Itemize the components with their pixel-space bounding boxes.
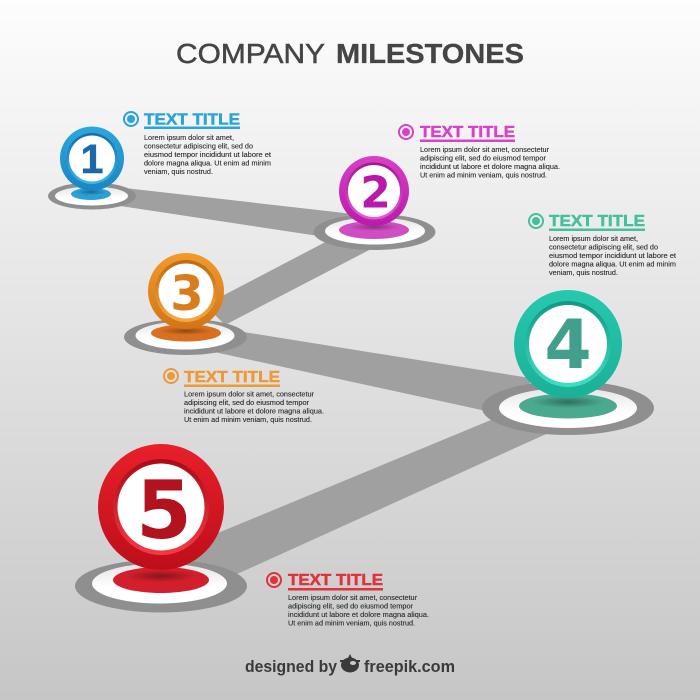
body 3: adipiscing elit, sed do eiusmod tempor: [184, 400, 310, 407]
body 5: [288, 595, 429, 628]
bullet 2: [399, 125, 413, 139]
milestone 3: [124, 253, 247, 355]
bullet 4: [529, 214, 543, 228]
body 3: Ut enim ad minim veniam, quis nostrud.: [184, 417, 312, 424]
base 3: [124, 319, 247, 355]
underline 3: [184, 384, 280, 387]
body 1: consectetur adipiscing elit, sed do: [144, 144, 253, 150]
ball 3: [148, 253, 224, 329]
milestone 4: [482, 290, 654, 435]
milestone 2: [314, 156, 436, 250]
body 2: [420, 147, 560, 180]
title: [176, 38, 524, 69]
title bold part: MILESTONES: [336, 38, 524, 69]
ball 1: [60, 126, 124, 190]
designed by: designed by: [245, 658, 338, 676]
body 2: incididunt ut labore et dolore magna aliqua.: [420, 164, 560, 171]
underline 5: [288, 588, 383, 590]
footer credit: [245, 654, 455, 676]
body 3: Lorem ipsum dolor sit amet, consectetur: [184, 392, 315, 398]
number 4: 4: [544, 306, 592, 385]
heading 4: TEXT TITLE: [549, 213, 645, 230]
bullet 1: [124, 112, 138, 126]
number 5: 5: [136, 464, 192, 557]
base 4: [482, 381, 654, 435]
body 5: Ut enim ad minim veniam, quis nostrud.: [288, 620, 415, 628]
bullet 3: [164, 369, 178, 383]
body 1: Lorem ipsum dolor sit amet,: [144, 135, 234, 142]
body 2: Lorem ipsum dolor sit amet, consectetur: [420, 147, 550, 154]
body 4: consectetur adipiscing elit, sed do: [549, 244, 658, 252]
milestone 5: [75, 444, 247, 612]
underline 4: [549, 228, 645, 231]
body 3: incididunt ut labore et dolore magna aliqua.: [184, 408, 324, 416]
body 1: veniam, quis nostrud.: [144, 169, 213, 176]
body 5: incididunt ut labore et dolore magna aliqua.: [288, 612, 429, 619]
body 5: Lorem ipsum dolor sit amet, consectetur: [288, 595, 418, 602]
number 3: 3: [170, 266, 204, 322]
ball 2: [339, 156, 409, 226]
body 1: [144, 135, 271, 176]
body 1: dolore magna aliqua. Ut enim ad minim: [144, 160, 271, 168]
number 2: 2: [360, 168, 391, 218]
body 4: Lorem ipsum dolor sit amet,: [549, 236, 638, 243]
base 1: [48, 182, 136, 210]
body 4: dolore magna aliqua. Ut enim ad minim: [549, 262, 676, 268]
text block 1: [124, 112, 271, 176]
body 1: eiusmod tempor incididunt ut labore et: [144, 152, 271, 159]
body 4: veniam, quis nostrud.: [549, 270, 618, 277]
body 2: adipiscing elit, sed do eiusmod tempor: [420, 156, 547, 162]
milestone path: [120, 188, 555, 584]
ball 4: [514, 290, 622, 398]
heading 1: TEXT TITLE: [144, 112, 240, 128]
body 4: eiusmod tempor incididunt ut labore et: [549, 253, 676, 260]
body 3: [184, 392, 324, 424]
base 2: [314, 214, 436, 250]
milestone 1: [48, 126, 136, 210]
icon: freepik mascot: [340, 654, 360, 672]
ball 5: [98, 444, 224, 570]
heading 2: TEXT TITLE: [420, 124, 515, 141]
text block 2: [399, 124, 560, 180]
body 4: [549, 236, 676, 277]
freepik.com: freepik.com: [364, 658, 455, 676]
bullet 5: [267, 573, 281, 587]
heading 3: TEXT TITLE: [184, 369, 280, 386]
number 1: 1: [81, 136, 103, 182]
base 5: [75, 560, 247, 612]
heading 5: TEXT TITLE: [288, 572, 383, 589]
text block 5: [267, 572, 429, 628]
text block 4: [529, 213, 676, 277]
body 2: Ut enim ad minim veniam, quis nostrud.: [420, 172, 547, 180]
underline 2: [420, 140, 515, 142]
body 5: adipiscing elit, sed do eiusmod tempor: [288, 604, 414, 610]
underline 1: [144, 126, 240, 129]
text block 3: [164, 369, 324, 424]
title regular part: COMPANY: [176, 38, 325, 69]
